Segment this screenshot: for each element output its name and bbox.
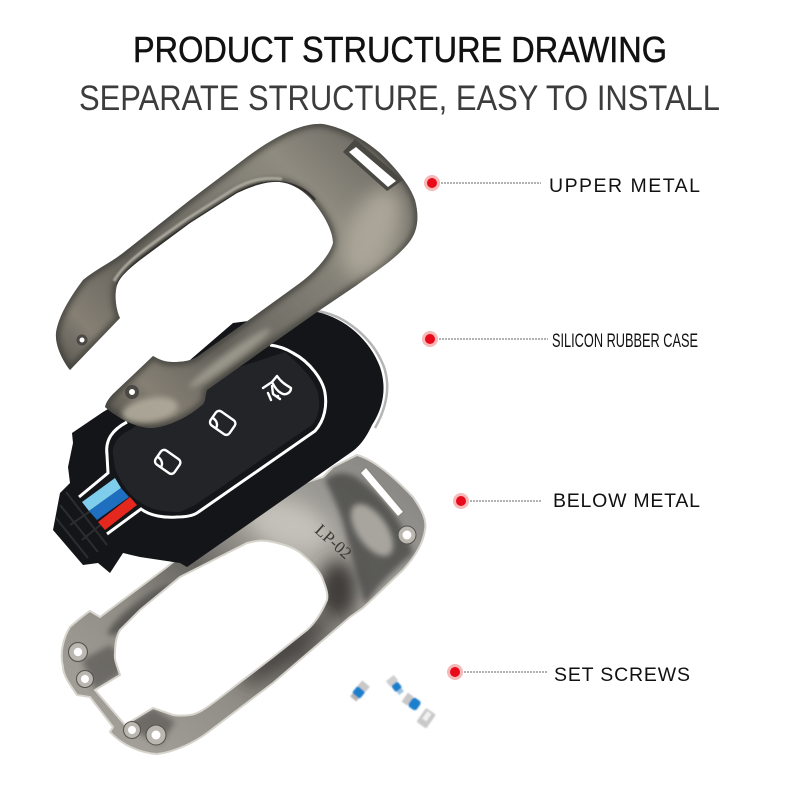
bright rim	[62, 455, 425, 754]
screw 2	[386, 675, 405, 696]
engraved model mark: LP-02	[311, 520, 355, 563]
screw bosses	[72, 528, 414, 742]
metal shading	[56, 124, 417, 428]
icon: trunk button	[263, 376, 291, 400]
subtitle: SEPARATE STRUCTURE, EASY TO INSTALL	[79, 79, 720, 118]
screw holes	[78, 336, 86, 344]
callout: below metal	[453, 490, 700, 512]
callout: silicon rubber case	[422, 331, 698, 352]
screw 4	[416, 708, 436, 729]
callout: upper metal	[424, 175, 700, 197]
title: PRODUCT STRUCTURE DRAWING	[133, 29, 667, 70]
metal shading	[82, 473, 413, 745]
inner recess	[325, 473, 413, 605]
case edge highlight	[317, 311, 387, 428]
silicon rubber case	[53, 311, 387, 573]
callout: set screws: SET SCREWS	[554, 664, 690, 686]
ribbed teeth	[56, 492, 107, 558]
white piping lower	[107, 345, 326, 534]
icon: unlock button	[208, 409, 237, 436]
callout: below metal: BELOW METAL	[553, 490, 700, 512]
screw 3	[402, 693, 422, 711]
white piping upper	[79, 422, 127, 497]
upper metal shell	[56, 124, 417, 428]
set screws	[349, 675, 436, 729]
slot in below metal	[360, 467, 404, 517]
case body	[53, 312, 384, 573]
key-ring slot	[343, 139, 403, 191]
callout: silicon rubber case: SILICON RUBBER CASE	[552, 331, 698, 352]
callout: upper metal: UPPER METAL	[549, 175, 700, 197]
screw 1	[349, 680, 370, 702]
tricolour stripes	[82, 478, 137, 530]
callout: set screws	[447, 664, 690, 686]
below metal shell	[62, 455, 425, 754]
inner button panel	[113, 352, 319, 512]
infographic canvas	[53, 36, 719, 755]
icon: lock button	[153, 448, 182, 475]
